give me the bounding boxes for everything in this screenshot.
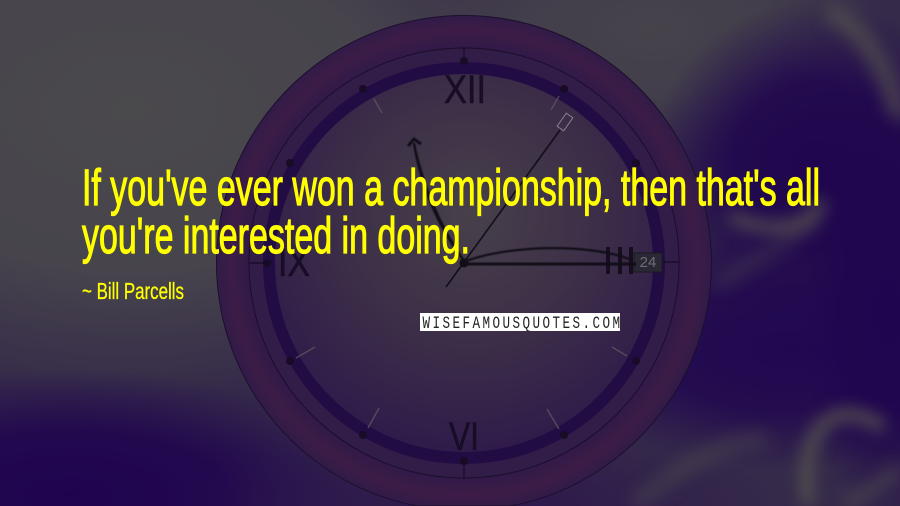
quote line 2: you're interested in doing. [82, 207, 470, 264]
clock: roman numerals: VI [449, 415, 479, 459]
clock: hour dots [263, 57, 640, 465]
attribution: ~ Bill Parcells [82, 278, 184, 304]
clock: centre pin [460, 258, 468, 268]
clock: outer rim [216, 16, 712, 506]
clock: date window [634, 253, 662, 272]
clock: numeral III [606, 247, 633, 274]
clock: light minute ticks [296, 96, 627, 429]
clock: roman numerals [278, 68, 486, 459]
clock: inner ring [249, 48, 679, 478]
clock: second hand [446, 113, 573, 287]
clock: minute hand [464, 248, 636, 264]
clock: date window: 24 [640, 254, 656, 271]
clock: roman numerals: XII [444, 68, 486, 112]
clock: roman numerals: IX [278, 241, 310, 285]
clock [216, 16, 712, 506]
clock: hour hand [408, 139, 465, 262]
watermark: WISEFAMOUSQUOTES.COM [422, 313, 623, 334]
clock: dark band [269, 68, 659, 458]
quote text [82, 159, 820, 264]
clock: cardinal tick marks [249, 47, 679, 479]
